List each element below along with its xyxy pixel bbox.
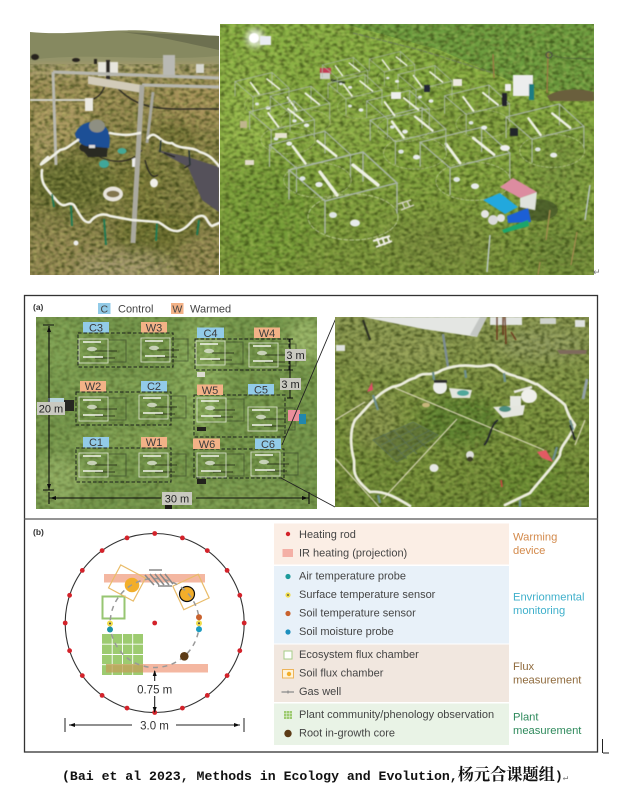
legend band: flux measurement [274,644,582,702]
chambers [433,380,447,394]
legend band: warming device [274,524,557,564]
ecosystem flux chamber [102,596,124,618]
photo: close-up of a single plot [335,317,589,508]
legend: control and warmed: W [172,303,182,315]
legend: control and warmed: Control [118,304,153,316]
plot labels: C6 [261,439,275,451]
plot labels: W6 [199,439,215,451]
return mark after photos: ↵ [593,267,601,277]
photo: researcher working in a warmed plot [30,30,219,275]
legend band: warming device: IR heating (projection) [299,548,407,560]
plot labels: W2 [85,381,101,393]
dimension: 20 m: 20 m [39,404,63,416]
plot labels: W4 [259,328,275,340]
panel label a: (a) [33,302,44,312]
aerial photo with plots [35,315,323,509]
figure frame [24,296,598,752]
legend band: flux measurement: Flux [513,661,535,673]
plot labels: C1 [89,437,103,449]
dashed treatment blocks [76,333,289,482]
legend band: plant measurement: Plant [513,712,539,724]
dimension: 20 m [37,325,65,490]
legend band: environmental monitoring: Surface temperature sensor [299,589,436,601]
soil flux chamber left [109,565,145,601]
dimension: 0.75 m: 0.75 m [137,684,172,696]
dashed ring [110,578,199,668]
legend band: environmental monitoring: Soil temperature sensor [299,608,416,620]
legend band: warming device: Heating rod [299,529,356,541]
legend band: environmental monitoring: Envrionmental [513,592,585,604]
dimension: 3.0 m [65,718,244,732]
legend: control and warmed: C [101,303,109,315]
fence and far objects [353,33,493,73]
legend band: flux measurement: Ecosystem flux chamber [299,649,419,661]
dimension: 30 m [49,492,309,506]
dimension: 3 m: 3 m [286,350,305,362]
legend band: plant measurement: measurement [513,725,582,737]
photo: drone view of experimental plots [220,24,600,275]
legend band: flux measurement: Soil flux chamber [299,668,384,680]
plant community grid [102,634,143,675]
legend band: plant measurement [274,704,582,745]
plot labels: C2 [147,381,161,393]
gas wells [145,570,173,586]
IR heating projections [104,574,208,672]
root in-growth core [180,652,189,661]
cable [41,133,219,231]
legend band: environmental monitoring: monitoring [513,605,565,617]
legend: control and warmed [98,303,231,316]
plot labels: C5 [254,384,268,396]
white hut and blue covers [518,199,558,221]
plot labels: W1 [146,437,162,449]
wavy cable [351,365,575,506]
dimension: 3 m: 3 m [281,379,300,391]
legend band: flux measurement: Gas well [299,686,341,698]
plot labels: C4 [203,328,218,340]
plot labels: C3 [89,322,103,334]
plot labels: W5 [202,385,218,397]
soil flux chamber right [173,574,209,610]
sensors [107,614,202,632]
heating rod ring [63,531,247,715]
legend band: flux measurement: measurement [513,674,582,686]
plots [289,152,398,240]
panel a: layout of plots [33,302,336,509]
legend band: plant measurement: Root in-growth core [299,728,395,740]
dimension: 30 m: 30 m [165,494,189,506]
dimension: 0.75 m [137,670,172,713]
citation caption: (Bai et al 2023, Methods in Ecology and Evolution,杨元合课题组)↵ [62,761,568,785]
plot labels [80,322,281,451]
grid [373,422,438,462]
legend band: warming device: device [513,545,545,557]
text cursor mark [602,739,609,753]
legend: control and warmed: Warmed [190,304,231,316]
ropes [335,388,585,508]
legend band: warming device: Warming [513,532,557,544]
dimension: 3.0 m: 3.0 m [140,720,169,732]
panel label b: (b) [33,527,44,537]
legend band: environmental monitoring: Air temperature probe [299,570,406,582]
legend band: environmental monitoring: Soil moisture probe [299,626,394,638]
frame and heater [88,76,142,93]
dimension: 3 m [280,339,306,398]
plot labels: W3 [146,322,162,334]
zoom connector lines [281,318,336,507]
legend band: plant measurement: Plant community/phenology observation [299,709,494,721]
legend band: environmental monitoring [274,566,585,644]
panel b: plot design diagram [33,524,585,745]
